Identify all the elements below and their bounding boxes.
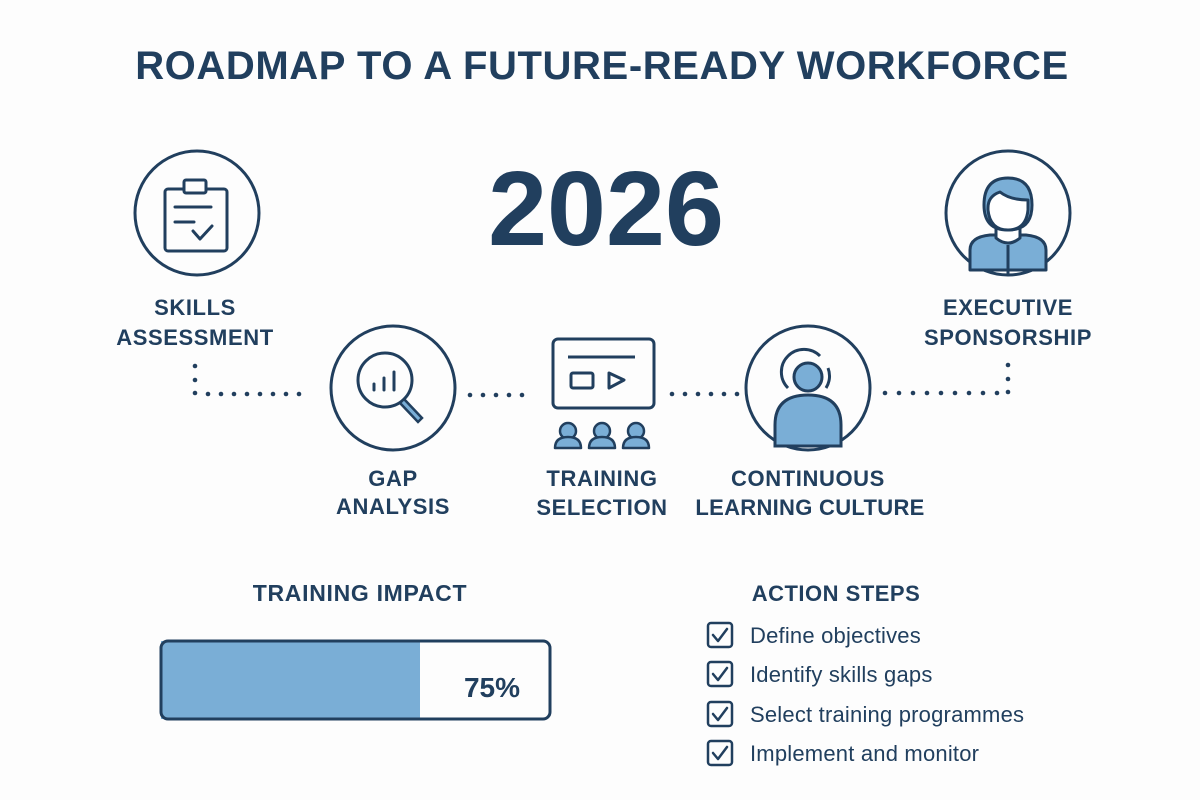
panel: action steps: Identify skills gaps (750, 662, 933, 687)
step: executive sponsorship (924, 151, 1092, 350)
step: skills assessment: SKILLS (154, 295, 236, 320)
panel: training impact: TRAINING IMPACT (253, 580, 467, 606)
icon: executive (946, 151, 1070, 275)
step: continuous learning culture (695, 326, 925, 520)
step: skills assessment: ASSESSMENT (116, 325, 274, 350)
panel: action steps: Select training programmes (750, 702, 1024, 727)
step: training selection (536, 339, 668, 520)
panel: action steps (708, 581, 1024, 766)
step: gap analysis: GAP (368, 466, 418, 491)
panel: action steps: ACTION STEPS (752, 581, 920, 606)
panel: training impact (161, 580, 550, 719)
panel: action steps: Define objectives (750, 623, 921, 648)
step: gap analysis: ANALYSIS (336, 494, 450, 519)
step: training selection: TRAINING (546, 466, 658, 491)
progress bar: 75% (464, 672, 520, 703)
step: executive sponsorship: SPONSORSHIP (924, 325, 1092, 350)
icon: clipboard (135, 151, 259, 275)
year: 2026 (488, 150, 724, 268)
step: gap analysis (331, 326, 455, 519)
dotted connector path (193, 363, 1010, 397)
progress bar (161, 641, 550, 719)
step: continuous learning culture: LEARNING CULTURE (695, 495, 925, 520)
icon: magnifier (331, 326, 455, 450)
icon: learner (746, 326, 870, 450)
step: skills assessment (116, 151, 274, 350)
step: executive sponsorship: EXECUTIVE (943, 295, 1073, 320)
step: training selection: SELECTION (536, 495, 668, 520)
icon: screen with audience (553, 339, 654, 448)
step: continuous learning culture: CONTINUOUS (731, 466, 885, 491)
panel: action steps: Implement and monitor (750, 741, 979, 766)
title: ROADMAP TO A FUTURE-READY WORKFORCE (135, 44, 1069, 88)
